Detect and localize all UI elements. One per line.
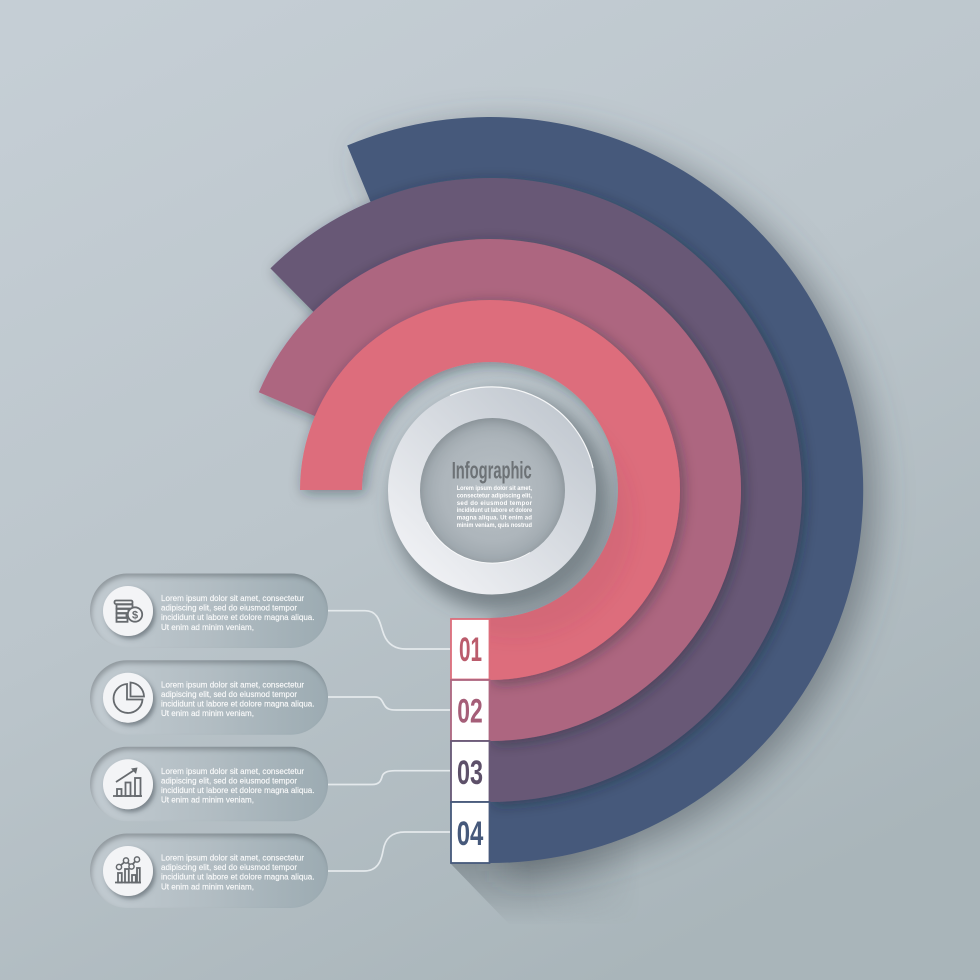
item text: adipiscing elit, sed do eiusmod tempor [161, 862, 297, 872]
icon: coins and dollar: $ [132, 610, 138, 622]
item text: adipiscing elit, sed do eiusmod tempor [161, 689, 297, 699]
inner well [420, 418, 565, 563]
item text: Ut enim ad minim veniam, [161, 881, 254, 891]
icon disc [103, 846, 153, 896]
box 02: 02 [457, 693, 483, 731]
long shadow under number column [451, 844, 616, 914]
item text: incididunt ut labore et dolore magna aliqua. [161, 872, 314, 882]
item text [161, 766, 314, 805]
pill background [90, 660, 328, 735]
item text: Lorem ipsum dolor sit amet, consectetur [161, 679, 304, 689]
connector 2 [328, 697, 450, 710]
icon: pie chart [114, 682, 144, 713]
panel: item 3 [90, 747, 328, 821]
item text [161, 593, 314, 632]
center paragraph: consectetur adipiscing elit, [457, 492, 532, 500]
box 01: 01 [459, 631, 482, 669]
box 02 [451, 680, 490, 741]
icon disc [103, 759, 153, 809]
item text: Ut enim ad minim veniam, [161, 795, 254, 805]
pill background [90, 747, 328, 821]
center paragraph: Lorem ipsum dolor sit amet, [457, 485, 532, 492]
pill background [90, 834, 328, 908]
well highlight [427, 522, 530, 563]
center heading: Infographic [452, 457, 532, 484]
icon disc [103, 673, 153, 723]
item text: Lorem ipsum dolor sit amet, consectetur [161, 593, 304, 603]
item text [161, 852, 314, 891]
box 03 [451, 741, 490, 802]
coral ring soft disc shade [490, 495, 622, 626]
ring 1: coral [300, 300, 680, 680]
ring 4: navy [347, 117, 863, 863]
icon: rising bar chart [113, 768, 142, 796]
center circle [388, 386, 596, 594]
connector 3 [328, 771, 450, 784]
ring 2: mauve [259, 239, 741, 741]
pill background [90, 574, 328, 648]
ring 3: plum [270, 178, 802, 802]
box 04 [451, 802, 490, 863]
connector 1 [328, 611, 450, 649]
item text: incididunt ut labore et dolore magna aliqua. [161, 698, 314, 708]
outer disc [388, 386, 596, 594]
center disc shadow on background [392, 392, 612, 612]
item text: incididunt ut labore et dolore magna aliqua. [161, 612, 314, 622]
item text: Ut enim ad minim veniam, [161, 708, 254, 718]
ring shadow: outer [361, 125, 877, 871]
box 01 [451, 619, 490, 680]
panel: item 1 [90, 574, 328, 648]
box 04: 04 [457, 815, 483, 853]
connector 4 [328, 832, 450, 871]
item text [161, 679, 314, 718]
panel: item 2 [90, 660, 328, 735]
item text: Ut enim ad minim veniam, [161, 622, 254, 632]
center paragraph [457, 485, 533, 529]
center paragraph: minim veniam, quis nostrud [457, 522, 532, 529]
connector lines [328, 611, 450, 871]
box 03: 03 [457, 754, 483, 792]
icon disc [103, 586, 153, 636]
center paragraph: magna aliqua. Ut enim ad [457, 514, 532, 522]
panel: item 4 [90, 834, 328, 908]
item text: adipiscing elit, sed do eiusmod tempor [161, 603, 297, 613]
item text: adipiscing elit, sed do eiusmod tempor [161, 775, 297, 785]
center paragraph: incididunt ut labore et dolore [457, 507, 533, 514]
item text: incididunt ut labore et dolore magna aliqua. [161, 785, 314, 795]
center paragraph: sed do eiusmod tempor [457, 500, 533, 507]
number column [451, 619, 490, 863]
concentric ring chart [259, 117, 877, 871]
disc highlight [450, 387, 593, 468]
icon: coins and dollar [114, 600, 142, 622]
icon: bars with nodes [115, 857, 141, 882]
item text: Lorem ipsum dolor sit amet, consectetur [161, 766, 304, 776]
item text: Lorem ipsum dolor sit amet, consectetur [161, 852, 304, 862]
